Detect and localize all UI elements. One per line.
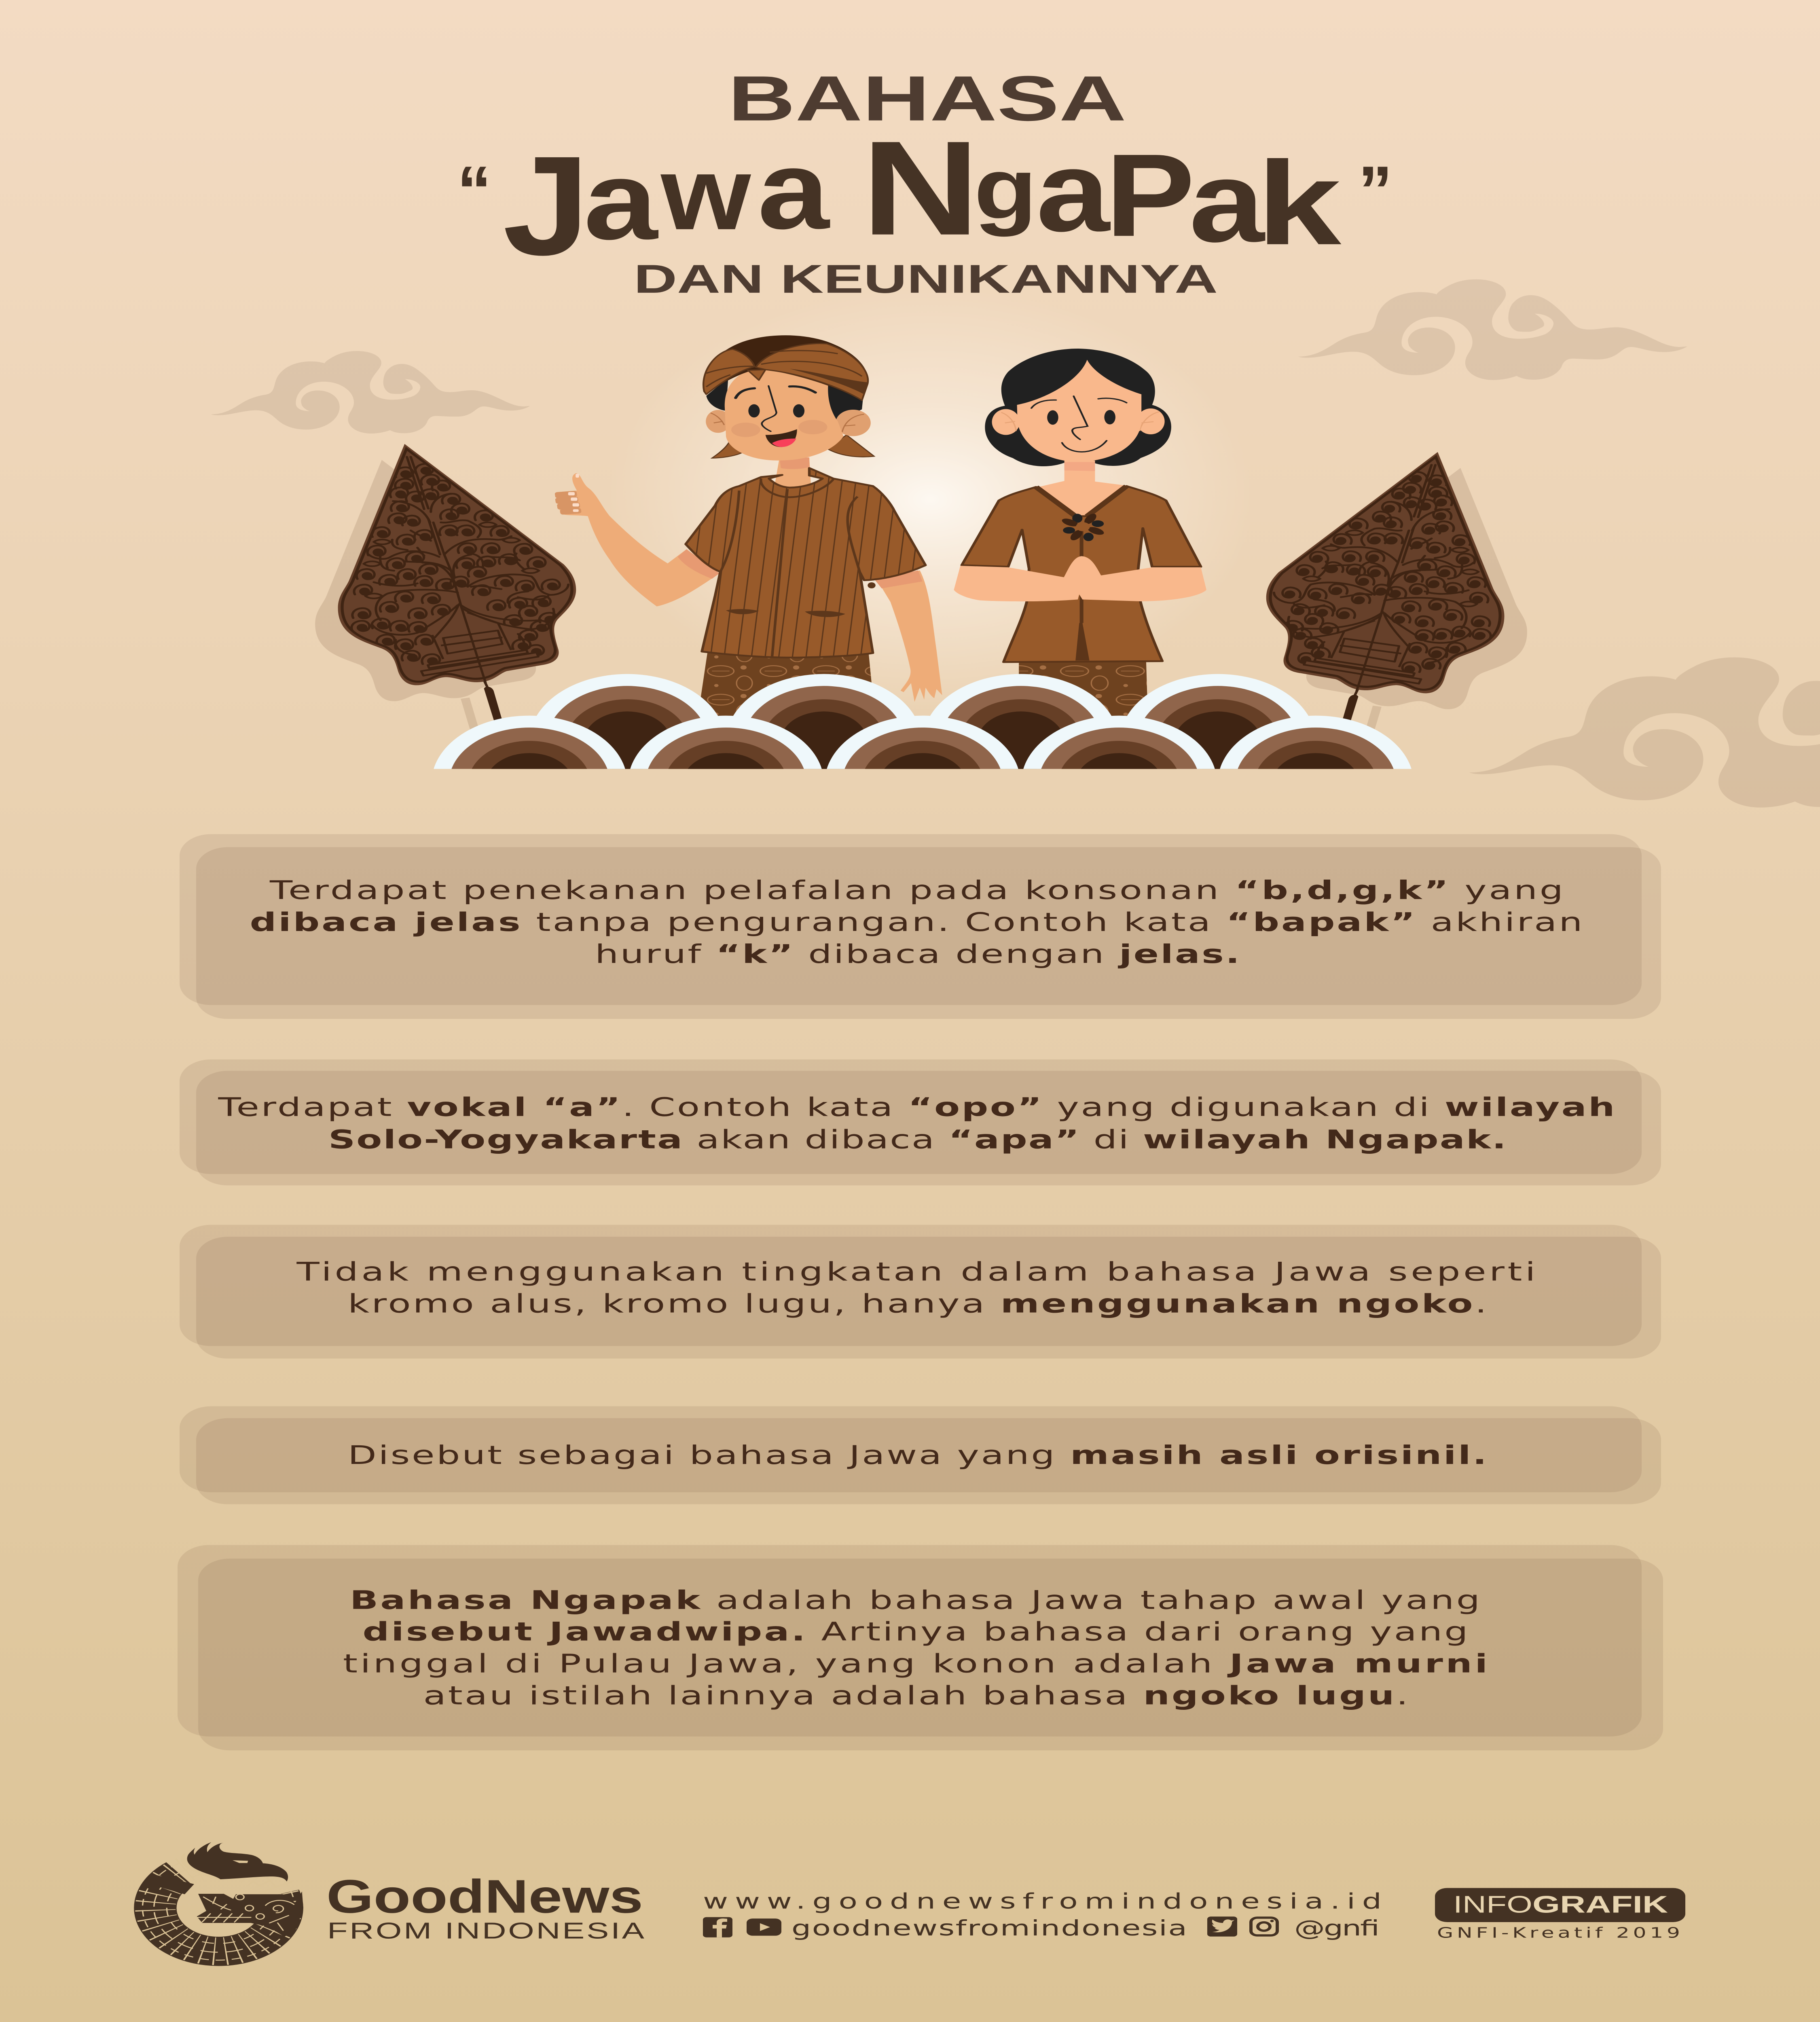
woman face	[1017, 360, 1141, 462]
title script: Jawa Ngapak: a	[1036, 127, 1111, 255]
credit line: GNFI-Kreatif 2019	[1437, 1925, 1680, 1941]
title line: DAN KEUNIKANNYA: DAN KEUNIKANNYA	[634, 256, 1218, 301]
man right arm	[880, 570, 942, 702]
footer brand name: FROM INDONESIA	[327, 1918, 645, 1944]
panel 4: original Javanese	[180, 1406, 1661, 1504]
icon: facebook	[703, 1917, 732, 1937]
panel 1 text: huruf “k” dibaca dengan jelas.	[595, 939, 1240, 969]
woman hair	[985, 349, 1171, 466]
panel 2: vowel a	[180, 1060, 1661, 1185]
website address: www.goodnewsfromindonesia.id	[703, 1889, 1382, 1914]
cloud: left	[211, 351, 530, 434]
title script: Jawa Ngapak: N	[861, 113, 980, 263]
panel 3: speech levels	[180, 1225, 1661, 1358]
title script: Jawa Ngapak: a	[758, 128, 830, 252]
panel 5 text: disebut Jawadwipa. Artinya bahasa dari orang yang	[363, 1617, 1468, 1647]
front scallop row	[434, 716, 1412, 769]
title script: Jawa Ngapak	[457, 113, 1393, 285]
panel 3 text: Tidak menggunakan tingkatan dalam bahasa Jawa seperti	[296, 1257, 1535, 1287]
panel 5 text	[343, 1585, 1488, 1711]
title script: Jawa Ngapak: g	[974, 140, 1037, 237]
footer logo mark	[142, 1842, 303, 1960]
title	[457, 63, 1393, 301]
man turban	[703, 335, 868, 400]
panel 2 text	[218, 1092, 1615, 1155]
scallop wave border	[434, 674, 1412, 769]
panel 5 text: atau istilah lainnya adalah bahasa ngoko lugu.	[423, 1681, 1408, 1711]
woman batik skirt	[1019, 659, 1148, 719]
panel 5: Jawadwipa	[178, 1545, 1663, 1750]
woman neck and chest	[1038, 461, 1126, 518]
man in batik shirt	[554, 335, 942, 719]
icon: youtube	[747, 1918, 781, 1936]
infografik badge: GRAFIK	[1532, 1891, 1668, 1918]
man hair	[706, 378, 863, 421]
turban tails	[712, 435, 874, 458]
footer brand name	[326, 1870, 645, 1944]
man striped shirt	[686, 468, 925, 658]
woman arms in greeting pose	[954, 556, 1206, 601]
man neck	[774, 457, 811, 488]
title script: Jawa Ngapak: w	[659, 135, 751, 252]
panel 2 text: Terdapat vokal “a”. Contoh kata “opo” yang digunakan di wilayah	[218, 1092, 1615, 1122]
panel 1: consonant emphasis	[180, 834, 1661, 1019]
panel 5 text: Bahasa Ngapak adalah bahasa Jawa tahap awal yang	[350, 1585, 1480, 1615]
panel 3 text	[296, 1257, 1535, 1319]
panel 1 text: dibaca jelas tanpa pengurangan. Contoh kata “bapak” akhiran	[250, 907, 1582, 937]
glow behind figures	[607, 289, 1254, 711]
title script: Jawa Ngapak: ”	[1358, 152, 1393, 230]
title line: BAHASA: BAHASA	[728, 63, 1126, 134]
title script: Jawa Ngapak: a	[1189, 137, 1265, 266]
panel 3 text: kromo alus, kromo lugu, hanya menggunakan ngoko.	[348, 1289, 1487, 1319]
woman kebaya	[962, 486, 1201, 662]
wayang gunungan right	[1266, 452, 1527, 739]
man trousers	[698, 651, 875, 719]
panel 1 text	[250, 876, 1582, 969]
title script: Jawa Ngapak: k	[1257, 137, 1342, 269]
cloud: lower right	[1469, 657, 1820, 808]
woman flower brooch	[1060, 512, 1106, 541]
rear scallop row	[537, 674, 1308, 769]
panel 5 text: tinggal di Pulau Jawa, yang konon adalah Jawa murni	[343, 1649, 1488, 1679]
man face	[725, 370, 844, 461]
woman ears	[992, 408, 1165, 435]
icon: instagram	[1251, 1918, 1277, 1935]
man ears	[706, 410, 871, 436]
panel 2 text: Solo-Yogyakarta akan dibaca “apa” di wilayah Ngapak.	[328, 1125, 1506, 1155]
panel 1 text: Terdapat penekanan pelafalan pada konsonan “b,d,g,k” yang	[269, 876, 1563, 905]
panel 4 text: Disebut sebagai bahasa Jawa yang masih asli orisinil.	[348, 1440, 1487, 1470]
title script: Jawa Ngapak: P	[1105, 129, 1195, 261]
infografik badge	[1435, 1888, 1685, 1922]
wayang gunungan left	[315, 444, 576, 731]
infografik badge: INFO	[1453, 1891, 1532, 1918]
title script: Jawa Ngapak: J	[503, 127, 590, 285]
title script: Jawa Ngapak: “	[457, 152, 491, 230]
man left arm with thumbs up	[554, 473, 720, 607]
cloud: upper right	[1298, 279, 1687, 380]
woman in kebaya	[954, 349, 1206, 719]
footer brand name: GoodNews	[326, 1870, 643, 1923]
title script: Jawa Ngapak: a	[584, 138, 658, 263]
icon: twitter	[1207, 1916, 1237, 1937]
social handle: goodnewsfromindonesia: goodnewsfromindonesia	[791, 1916, 1187, 1941]
social handle: @gnfi: @gnfi	[1294, 1916, 1380, 1941]
